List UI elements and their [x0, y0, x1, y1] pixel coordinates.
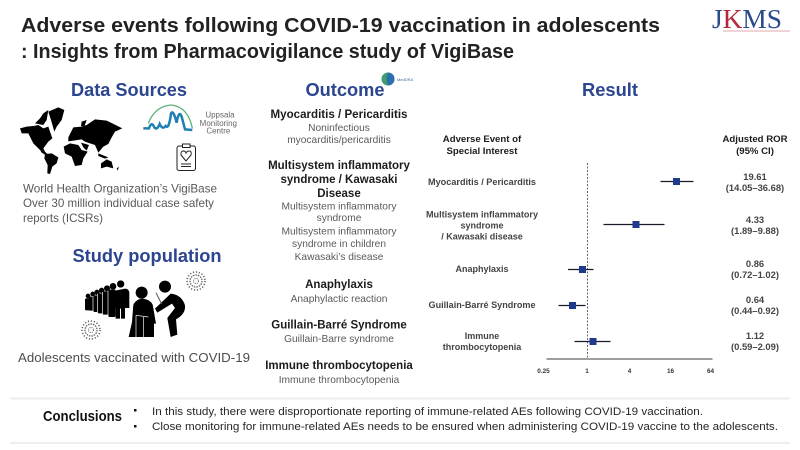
outcome: immune thrombocytopenia: Immune thrombocytopenia — [279, 375, 400, 386]
column header: adjusted ROR: (95% CI) — [736, 146, 774, 157]
outcome: myocarditis — [270, 109, 408, 146]
point: myocarditis — [660, 178, 694, 185]
ROR values: 0.86 — [746, 258, 764, 269]
title: : Insights from Pharmacovigilance study of VigiBase — [21, 40, 514, 63]
outcome: myocarditis: Noninfectious — [308, 123, 370, 134]
outcome: myocarditis: myocarditis/pericarditis — [287, 135, 391, 146]
event labels: syndrome — [460, 220, 504, 230]
tick labels: 16 — [667, 368, 674, 375]
event labels: Guillain-Barré Syndrome — [428, 300, 536, 310]
column header: adverse event: Adverse Event of — [443, 134, 522, 145]
tick labels: 64 — [707, 368, 714, 375]
outcome: immune thrombocytopenia — [265, 360, 413, 386]
column header: adjusted ROR — [722, 134, 788, 157]
heading: result: Result — [582, 79, 638, 100]
icon: clipboard — [177, 144, 196, 170]
event labels: thrombocytopenia — [443, 342, 522, 352]
ROR values: (0.59–2.09) — [731, 341, 779, 352]
event labels: Anaphylaxis — [455, 264, 509, 274]
ROR values: (1.89–9.88) — [731, 225, 779, 236]
ROR values: (14.05–36.68) — [726, 182, 784, 193]
outcome: multisystem inflammatory syndrome: syndrome — [317, 213, 362, 224]
event labels — [426, 177, 538, 352]
outcome: anaphylaxis — [291, 279, 387, 305]
logo: MedDRA — [382, 72, 414, 86]
outcome: guillain-barre: Guillain-Barré Syndrome — [271, 320, 407, 332]
column header: adverse event: Special Interest — [447, 146, 518, 157]
conclusion bullets: In this study, there were disproportionate reporting of immune-related AEs following COVID-19 vaccination. — [152, 406, 703, 418]
point: anaphylaxis — [568, 266, 594, 273]
outcome: multisystem inflammatory syndrome: Kawasaki’s disease — [295, 252, 384, 263]
column header: adverse event — [443, 134, 522, 157]
text: data source description — [23, 182, 217, 225]
panel: result — [426, 79, 788, 375]
event labels: Multisystem inflammatory — [426, 210, 538, 220]
icon: virus bottom left — [82, 321, 100, 339]
heading: data sources: Data Sources — [71, 79, 187, 100]
title — [21, 14, 660, 63]
icon: vaccination queue — [85, 280, 185, 337]
outcome: myocarditis: Myocarditis / Pericarditis — [270, 109, 408, 121]
outcome: multisystem inflammatory syndrome: Multisystem inflammatory — [282, 226, 397, 238]
outcome: multisystem inflammatory syndrome — [268, 160, 411, 263]
logo: Uppsala Monitoring Centre: Centre — [206, 126, 231, 135]
point: multisystem — [604, 221, 664, 228]
reference line — [586, 163, 588, 359]
heading: study population: Study population — [72, 245, 222, 266]
ROR values: 1.12 — [746, 330, 764, 341]
outcome: immune thrombocytopenia: Immune thrombocytopenia — [265, 360, 413, 372]
tick labels: 0.25 — [537, 368, 550, 375]
outcome: multisystem inflammatory syndrome: Multisystem inflammatory — [268, 160, 411, 172]
panel: study population — [18, 245, 250, 365]
outcome: anaphylaxis: Anaphylactic reaction — [291, 294, 387, 305]
ROR values — [726, 171, 784, 352]
outcome: anaphylaxis: Anaphylaxis — [305, 279, 373, 291]
ROR values: (0.72–1.02) — [731, 269, 779, 280]
panel: conclusions — [10, 398, 790, 444]
event labels: / Kawasaki disease — [441, 232, 523, 242]
column header: adjusted ROR: Adjusted ROR — [722, 134, 788, 145]
tick labels: 1 — [585, 368, 589, 375]
icon: virus top right — [187, 272, 205, 290]
logo: MedDRA: MedDRA — [397, 77, 414, 82]
outcome: guillain-barre — [271, 320, 407, 345]
point: guillain-barre — [558, 302, 586, 309]
outcome: guillain-barre: Guillain-Barre syndrome — [284, 334, 394, 345]
tick labels — [537, 368, 714, 375]
tick labels: 4 — [628, 368, 632, 375]
text: study population description: Adolescents vaccinated with COVID-19 — [18, 350, 250, 365]
conclusions label: Conclusions — [43, 408, 122, 425]
heading: outcome: Outcome — [306, 79, 384, 100]
panel: outcome — [265, 72, 414, 386]
outcome: multisystem inflammatory syndrome: syndrome in children — [292, 239, 386, 250]
outcome: multisystem inflammatory syndrome: syndrome / Kawasaki — [281, 174, 397, 186]
outcome: multisystem inflammatory syndrome: Multisystem inflammatory — [282, 202, 397, 212]
event labels: Myocarditis / Pericarditis — [428, 177, 536, 187]
ROR values: (0.44–0.92) — [731, 305, 779, 316]
conclusion bullets — [134, 406, 778, 433]
forest plot — [537, 163, 714, 375]
axis — [546, 358, 712, 360]
ROR values: 4.33 — [746, 214, 764, 225]
text: data source description: Over 30 million individual case safety — [23, 196, 214, 210]
logo: Uppsala Monitoring Centre — [143, 105, 237, 135]
panel: data sources — [20, 79, 237, 225]
outcome: multisystem inflammatory syndrome: Disease — [317, 188, 361, 200]
conclusion bullets: Close monitoring for immune-related AEs needs to be ensured when administering COVID-19 vaccine to the adolescents. — [152, 421, 778, 433]
icon: world map — [20, 107, 122, 174]
event labels: Immune — [465, 331, 499, 341]
logo: Uppsala Monitoring Centre: Monitoring — [200, 119, 237, 128]
text: data source description: World Health Organization’s VigiBase — [23, 182, 217, 196]
text: data source description: reports (ICSRs) — [23, 211, 103, 225]
ROR values: 19.61 — [743, 171, 767, 182]
point: immune thrombocytopenia — [574, 338, 610, 345]
logo: JKMS: JKMS — [712, 4, 782, 34]
title: Adverse events following COVID-19 vaccination in adolescents — [21, 14, 660, 37]
logo: Uppsala Monitoring Centre: Uppsala — [205, 110, 235, 119]
ROR values: 0.64 — [746, 294, 765, 305]
